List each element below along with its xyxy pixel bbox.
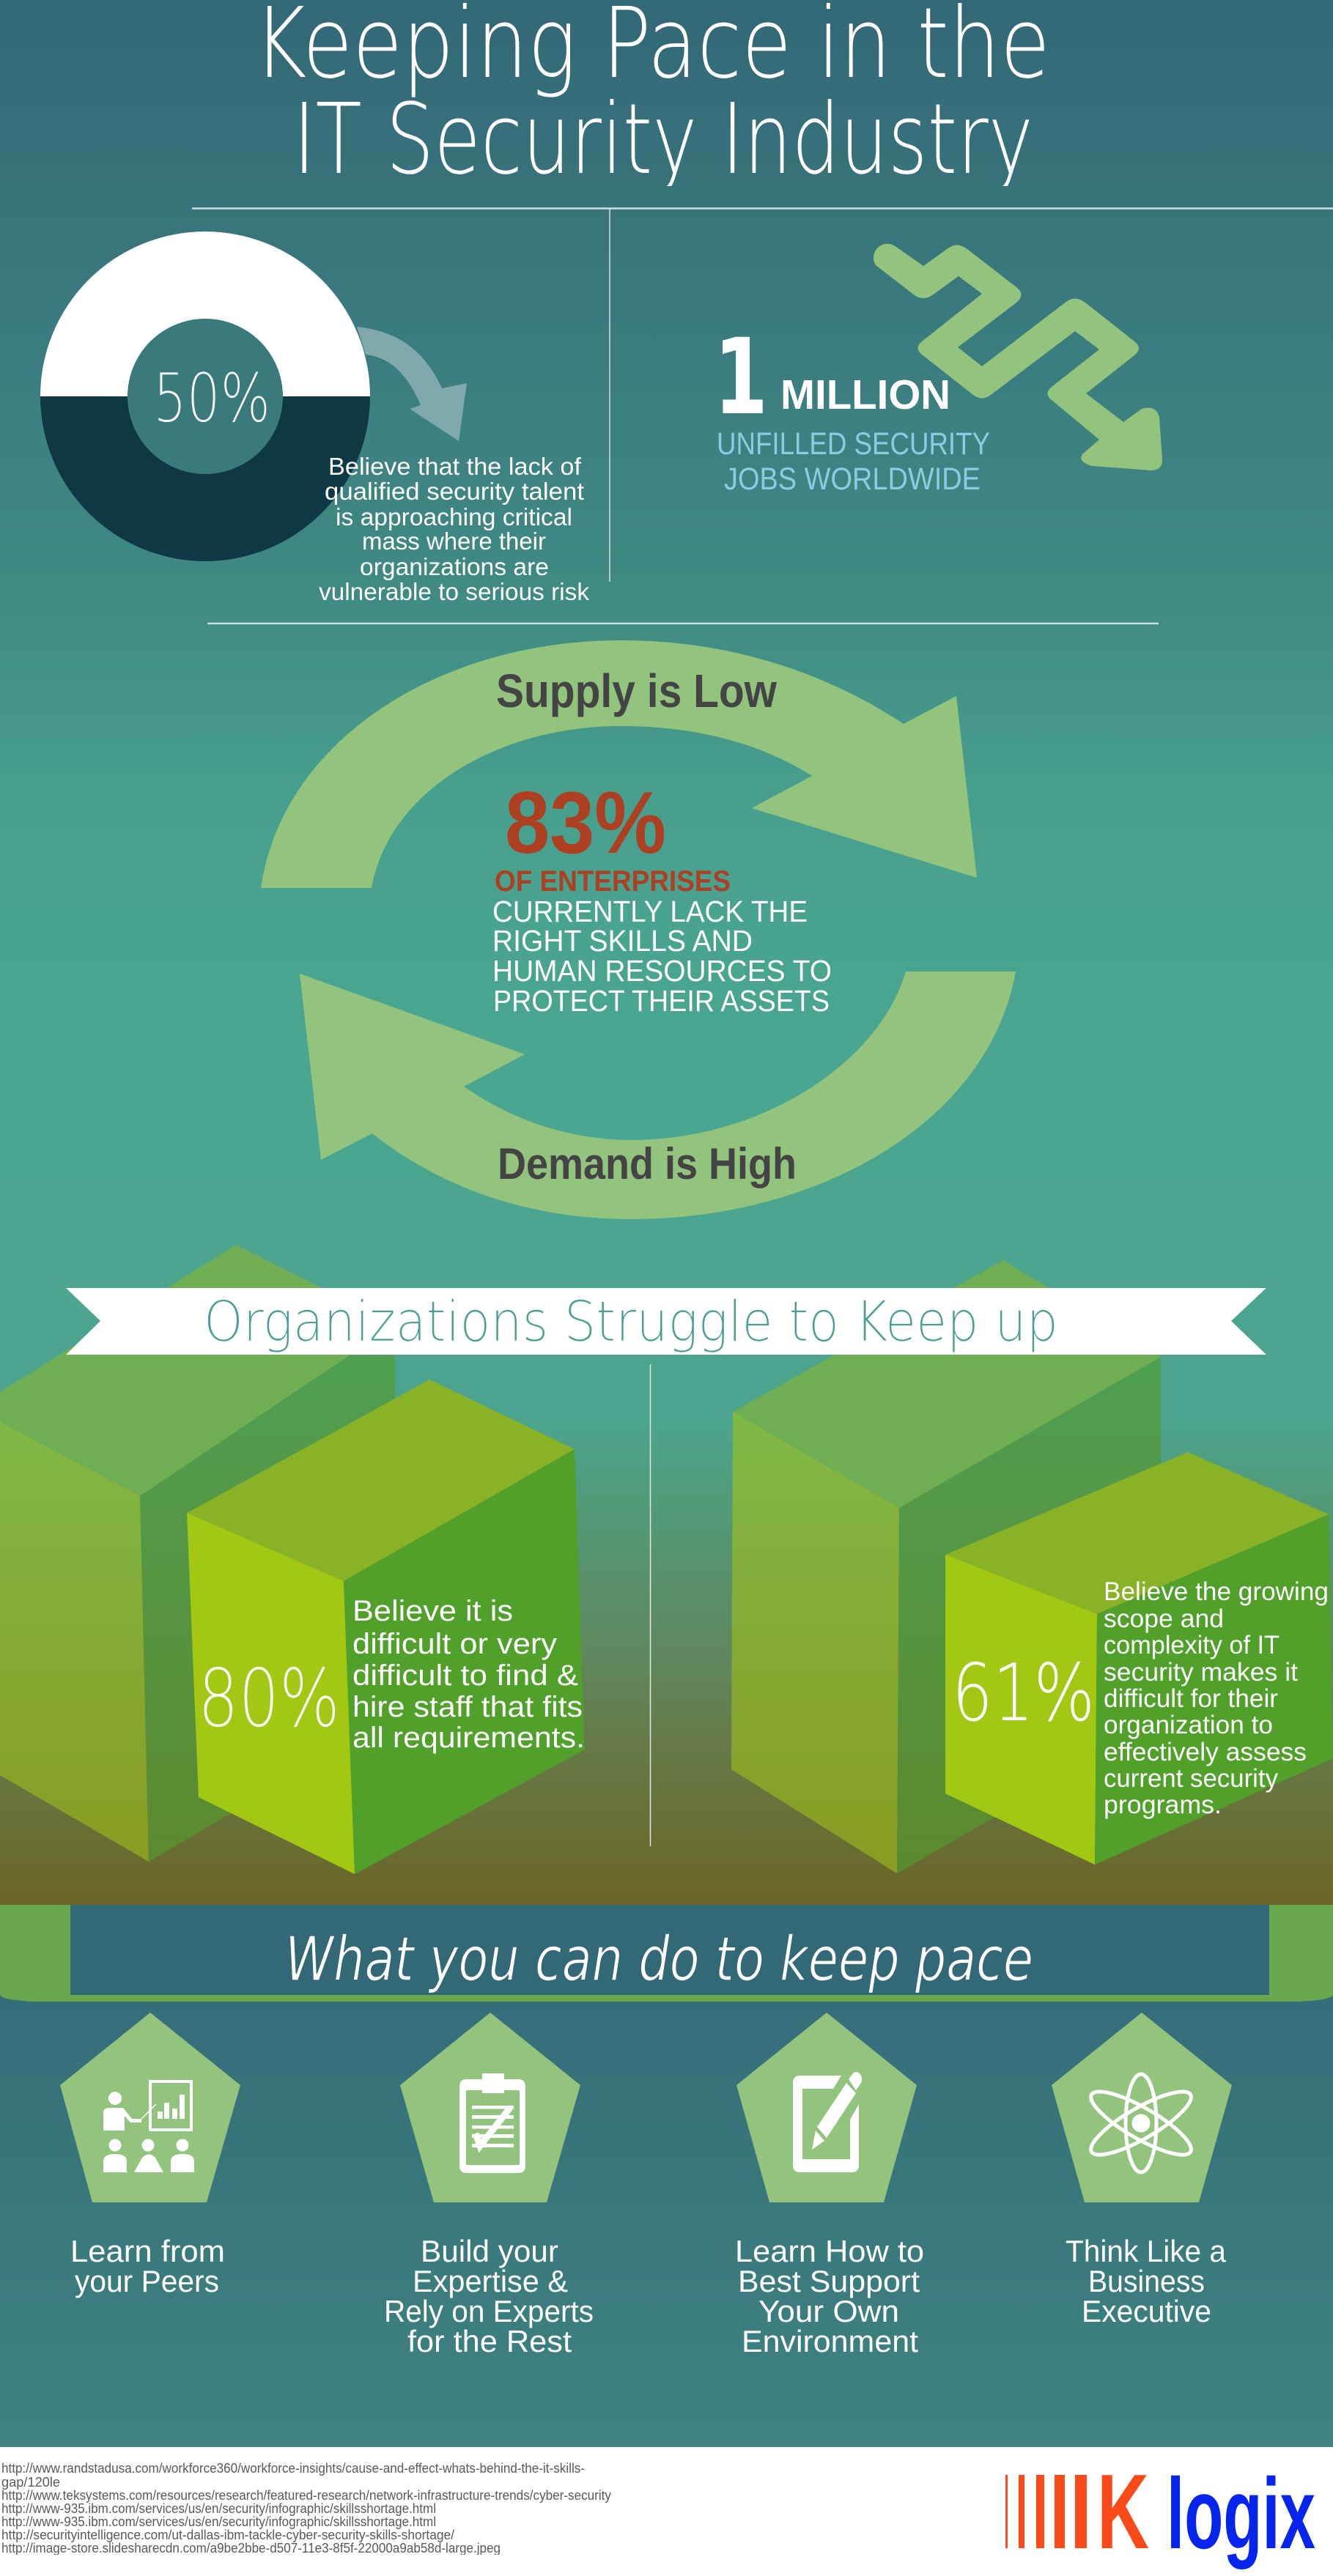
61% description: programs. [1104, 1791, 1222, 1819]
label: Best Support [738, 2264, 920, 2298]
citations: http://www.randstadusa.com/workforce360/workforce-insights/cause-and-effect-whats-behind-the-it-skills- [1, 2461, 585, 2476]
logo: K logix [1005, 2452, 1315, 2571]
arrow: supply arc [261, 640, 977, 888]
label: Executive [1082, 2294, 1211, 2328]
back cuboid left [0, 1245, 395, 1862]
MILLION label: MILLION [780, 371, 950, 418]
panel: supply and demand cycle [261, 640, 1016, 1219]
pentagon [736, 2013, 917, 2202]
heading: What you can do to keep pace [285, 1923, 1033, 1995]
citations [1, 2461, 611, 2555]
label: Business [1088, 2264, 1205, 2298]
cycle description: PROTECT THEIR ASSETS [493, 984, 830, 1018]
label: your Peers [75, 2264, 219, 2298]
back cuboid right [731, 1260, 1161, 1873]
83% value: 83% [505, 774, 666, 872]
61% description: security makes it [1104, 1658, 1298, 1687]
citations: http://www-935.ibm.com/services/us/en/security/infographic/skillsshortage.html [1, 2501, 436, 2516]
61% description: Believe the growing [1104, 1577, 1329, 1606]
61% value: 61% [952, 1648, 1095, 1739]
61% description: scope and [1104, 1605, 1224, 1633]
panel: build your expertise [384, 2013, 594, 2358]
description text: is approaching critical [336, 503, 572, 530]
lower teal panel [0, 1905, 1333, 2447]
cycle description: HUMAN RESOURCES TO [492, 954, 832, 988]
icon: presenter [103, 2081, 194, 2172]
label [384, 2234, 594, 2358]
icon: tablet and pencil [793, 2072, 862, 2172]
unfilled jobs text: JOBS WORLDWIDE [724, 462, 981, 497]
80% description [352, 1595, 585, 1754]
80% value: 80% [198, 1651, 340, 1745]
unfilled jobs text [717, 426, 990, 497]
61% description: effectively assess [1104, 1738, 1307, 1766]
80% description: difficult or very [352, 1628, 557, 1660]
citations: http://image-store.slidesharecdn.com/a9be2bbe-d507-11e3-8f5f-22000a9ab58d-large.jpeg [1, 2541, 501, 2555]
61% description: organization to [1104, 1711, 1273, 1739]
banner: Organizations Struggle to Keep up: Organizations Struggle to Keep up [204, 1289, 1058, 1354]
citations: http://securityintelligence.com/ut-dallas-ibm-tackle-cyber-security-skills-shortage/ [1, 2528, 454, 2542]
61% description [1104, 1577, 1329, 1819]
donut chart [40, 232, 370, 561]
center divider line [649, 1364, 651, 1846]
icon: zigzag arrow [874, 244, 1162, 470]
cycle description: RIGHT SKILLS AND [492, 924, 753, 958]
label [70, 2234, 225, 2298]
icon: atom [1084, 2074, 1198, 2172]
61% description: current security [1104, 1764, 1278, 1793]
divider lines top section [192, 208, 1333, 623]
panel: learn how to support [735, 2013, 924, 2358]
80% description: difficult to find & [352, 1659, 578, 1692]
label: Environment [742, 2324, 918, 2358]
61% description: difficult for their [1104, 1684, 1278, 1713]
description text: mass where their [362, 528, 546, 555]
arrow: demand arc [300, 971, 1016, 1219]
50% value: 50% [153, 359, 270, 437]
description text: vulnerable to serious risk [319, 578, 590, 605]
title: IT Security Industry [293, 84, 1033, 196]
61% description: complexity of IT [1104, 1631, 1280, 1659]
panel: 50% donut stat [40, 232, 590, 605]
Demand is High heading: Demand is High [498, 1139, 797, 1188]
description text: qualified security talent [325, 478, 584, 505]
pentagon [400, 2013, 580, 2202]
panel: 1 million jobs stat [714, 244, 1162, 497]
80% description: Believe it is [352, 1595, 513, 1627]
cycle description [492, 895, 832, 1018]
label: Build your [421, 2234, 558, 2268]
title [254, 0, 1050, 196]
citations: gap/120le [1, 2475, 60, 2490]
label: Learn from [70, 2234, 225, 2268]
panel: 80% left cuboids [0, 1245, 585, 1874]
background gradient [0, 0, 1333, 1905]
Supply is Low heading: Supply is Low [496, 665, 777, 717]
description text: Believe that the lack of [328, 453, 582, 480]
label [735, 2234, 924, 2358]
label: Think Like a [1066, 2234, 1227, 2268]
cycle description: CURRENTLY LACK THE [492, 895, 808, 928]
front cuboid left [187, 1380, 585, 1874]
label [1066, 2234, 1227, 2328]
citations: http://www.teksystems.com/resources/research/featured-research/network-infrastructure-trends/cyber-security [1, 2488, 611, 2503]
icon: curved arrow [357, 327, 467, 441]
label: Expertise & [413, 2264, 568, 2298]
description text [319, 453, 590, 605]
label: Rely on Experts [384, 2294, 594, 2328]
unfilled jobs text: UNFILLED SECURITY [717, 426, 990, 462]
panel: think like a business executive [1052, 2013, 1232, 2328]
icon: clipboard [459, 2073, 525, 2173]
citations: http://www-935.ibm.com/services/us/en/security/infographic/skillsshortage.html [1, 2514, 436, 2529]
1 value: 1 [714, 316, 768, 438]
front cuboid right [945, 1452, 1333, 1865]
label: for the Rest [407, 2324, 572, 2358]
of enterprises label: OF ENTERPRISES [495, 865, 731, 897]
pentagon [60, 2013, 240, 2202]
label: Learn How to [735, 2234, 924, 2268]
80% description: all requirements. [352, 1722, 585, 1754]
description text: organizations are [360, 553, 549, 580]
80% description: hire staff that fits [352, 1691, 583, 1723]
pentagon [1052, 2013, 1232, 2202]
logo: K logix: K [1097, 2452, 1149, 2571]
panel: learn from peers [60, 2013, 240, 2298]
footer background [0, 2447, 1333, 2576]
panel: what you can do header [0, 1905, 1333, 2002]
label: Your Own [758, 2294, 899, 2328]
panel: 61% right cuboids [731, 1260, 1333, 1873]
